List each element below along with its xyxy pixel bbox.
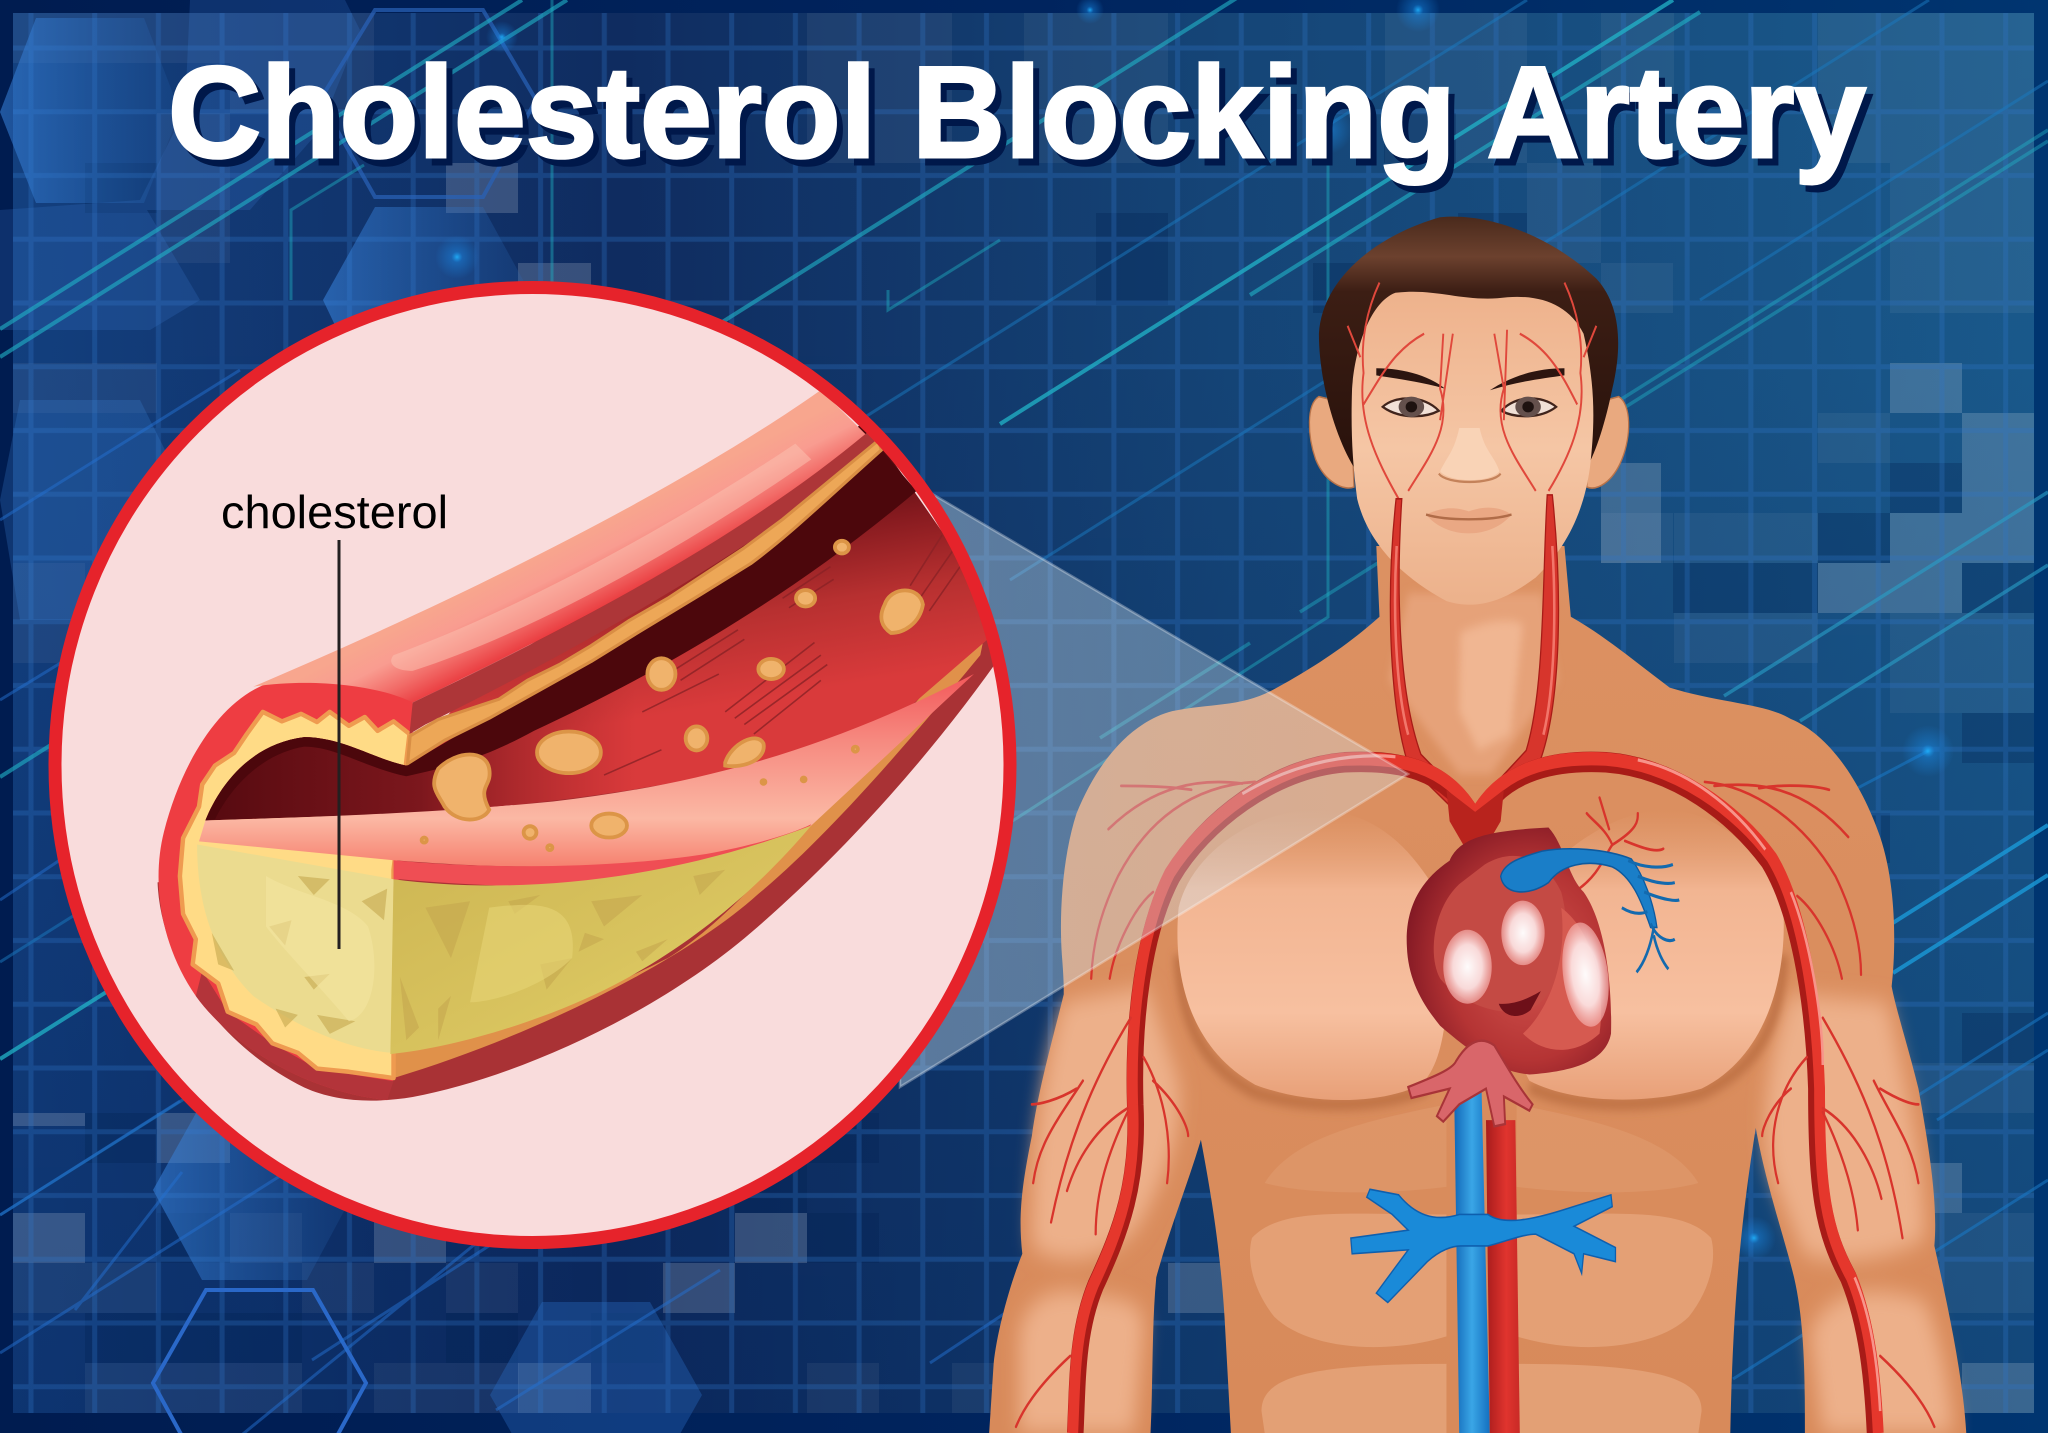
right pectoral bbox=[1512, 809, 1784, 1100]
arm shading bbox=[1019, 986, 1954, 1433]
top wall highlight bbox=[391, 444, 811, 671]
artery cross-section illustration bbox=[158, 390, 1006, 1101]
pectoral under-shadow bbox=[1179, 955, 1783, 1104]
face bbox=[1352, 292, 1593, 605]
title: Cholesterol Blocking Artery bbox=[168, 39, 1866, 185]
nose bbox=[1439, 428, 1501, 482]
abdominal vein branches bbox=[1351, 1189, 1615, 1303]
plaque mottling bbox=[212, 870, 725, 1040]
abdominal artery bbox=[1486, 1120, 1520, 1433]
inner lumen wall bbox=[205, 422, 1006, 820]
heart bbox=[1407, 828, 1679, 1126]
floor of artery bbox=[199, 674, 974, 867]
outer lower wall bbox=[158, 640, 994, 1101]
connector magnifier beam bbox=[900, 475, 1408, 1087]
eyes bbox=[1383, 397, 1556, 417]
magnified artery circle bbox=[54, 287, 1010, 1243]
upper orange plaque band bbox=[408, 440, 881, 764]
label line bbox=[338, 540, 340, 949]
lips bbox=[1426, 508, 1512, 533]
orange lower band bbox=[387, 624, 987, 1078]
heart aortic root bbox=[1408, 1041, 1533, 1126]
abdominal vein bbox=[1454, 1089, 1490, 1433]
eyebrows bbox=[1376, 368, 1564, 390]
neck arteries bbox=[1390, 495, 1559, 821]
upper cut wall bbox=[409, 433, 881, 734]
ring lower shade bbox=[196, 971, 394, 1100]
body silhouette bbox=[989, 546, 1966, 1433]
label: cholesterol: cholesterol bbox=[221, 486, 448, 538]
top tube wall bbox=[253, 390, 872, 702]
artery branches bbox=[1016, 782, 1934, 1427]
circle border bbox=[55, 288, 1010, 1242]
abdomen muscles bbox=[1250, 1104, 1713, 1433]
ears bbox=[1309, 397, 1629, 488]
lumen stripes bbox=[604, 535, 964, 775]
plaque long section bbox=[390, 826, 811, 1054]
facial veins bbox=[1348, 283, 1596, 499]
human body figure bbox=[989, 217, 1966, 1433]
circle background bbox=[54, 287, 1010, 1243]
front lip bbox=[394, 824, 811, 886]
left pectoral bbox=[1177, 809, 1448, 1100]
neck highlight bbox=[1459, 621, 1523, 750]
neck bbox=[1389, 593, 1558, 774]
cholesterol deposits bbox=[422, 541, 923, 850]
arm and shoulder arteries bbox=[1073, 756, 1880, 1433]
plaque front bbox=[197, 844, 394, 1053]
hair bbox=[1319, 217, 1618, 467]
dark lumen shadow bbox=[205, 447, 917, 820]
ring yellow plaque edge bbox=[180, 712, 409, 1078]
left lumen darkness bbox=[205, 697, 610, 820]
arch trunk into heart bbox=[1446, 790, 1504, 849]
outer front ring bbox=[159, 679, 413, 1100]
heart vein branches bbox=[1622, 861, 1679, 972]
heart vein bbox=[1501, 849, 1657, 927]
